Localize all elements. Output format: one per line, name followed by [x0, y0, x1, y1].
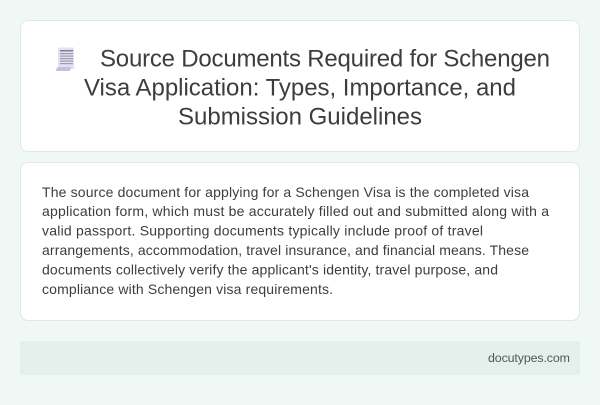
- title: [84, 46, 550, 130]
- panel: description card: [20, 162, 580, 321]
- panel: title card: [20, 20, 580, 152]
- footer text: docutypes.com: [488, 351, 570, 365]
- title: Visa Application: Types, Importance, and: [84, 74, 516, 102]
- text block: description: documents collectively verify the applicant's identity, travel purpose, and: [42, 262, 498, 278]
- footer bar: [20, 341, 580, 375]
- title: Submission Guidelines: [178, 104, 422, 130]
- text block: description: arrangements, accommodation, travel insurance, and financial means. These: [42, 242, 529, 258]
- text block: description: application form, which must be accurately filled out and submitted along with a: [42, 203, 549, 219]
- text block: description: valid passport. Supporting documents typically include proof of travel: [42, 222, 483, 238]
- icon: document scroll: [56, 47, 74, 71]
- text block: description: compliance with Schengen visa requirements.: [42, 281, 333, 297]
- title: Source Documents Required for Schengen: [100, 46, 550, 72]
- text block: description: [42, 184, 550, 297]
- text block: description: The source document for applying for a Schengen Visa is the completed visa: [42, 184, 529, 200]
